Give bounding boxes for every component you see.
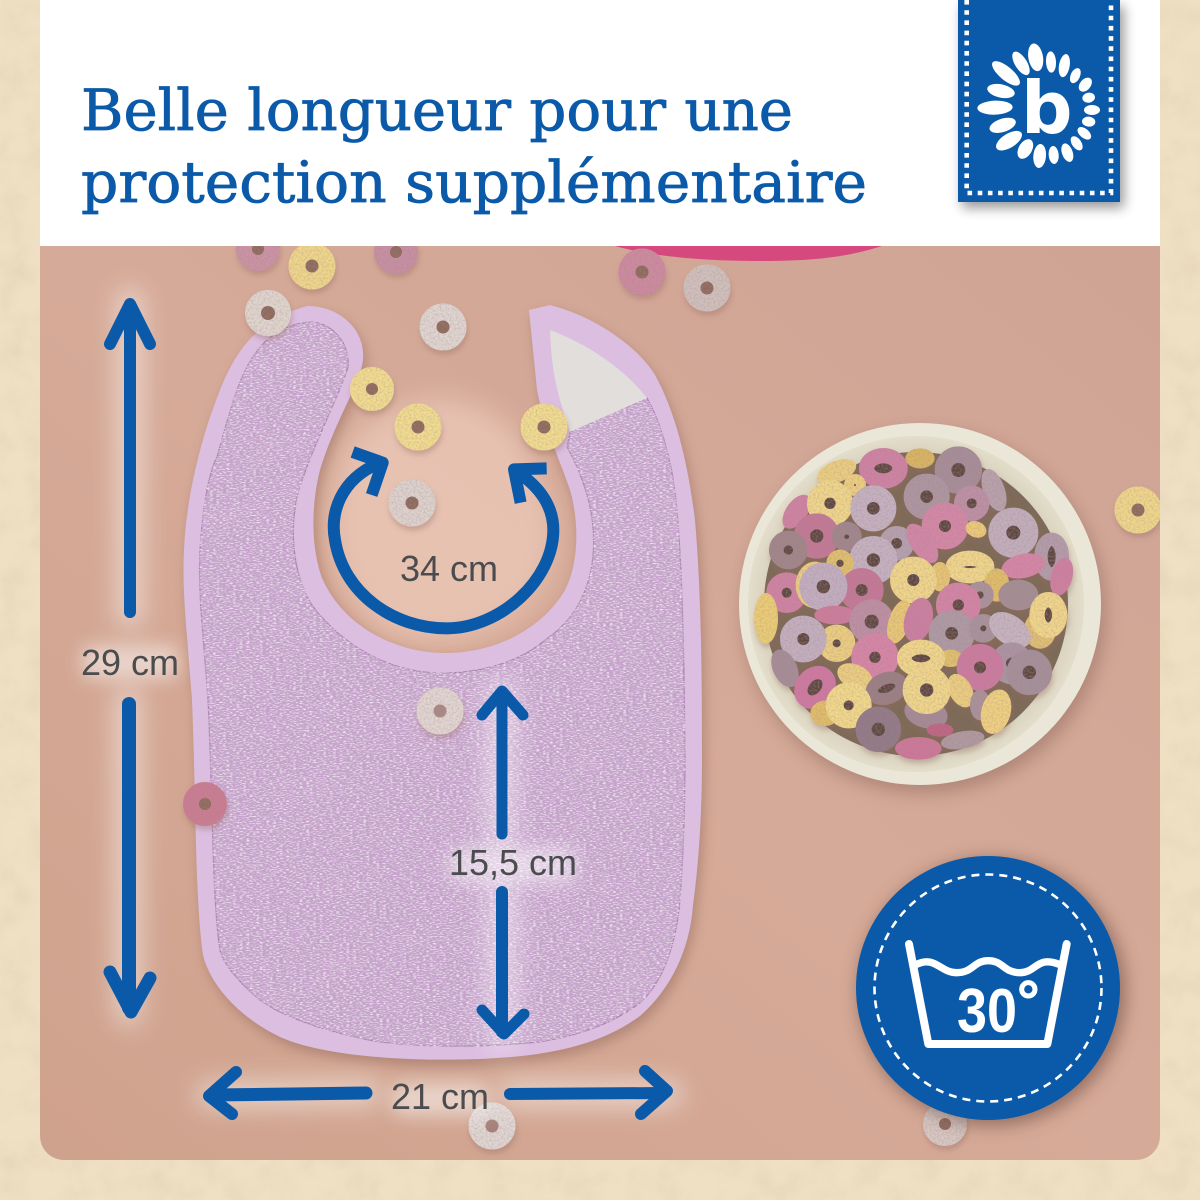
panel: photo surface (40, 235, 1160, 1160)
loose cereal behind bib (244, 235, 1153, 1138)
badge: wash 30 degrees (856, 856, 1120, 1120)
measurement labels: 15,5 cm (449, 842, 577, 883)
cereal rings (754, 448, 1077, 760)
arrow: width 21 cm (209, 1071, 667, 1114)
arrow glow (128, 300, 670, 1095)
arrow: neck 34 cm (334, 452, 553, 628)
icon: wash tub (909, 944, 1067, 1044)
measurement labels: 21 cm (391, 1076, 489, 1117)
neck glow (332, 399, 553, 640)
measurement labels (81, 548, 577, 1117)
badge shadow (859, 859, 1125, 1125)
icon: flower petals (977, 42, 1100, 169)
bib shadow (186, 311, 705, 1066)
cereal on bib (191, 298, 559, 1141)
measurement labels: 34 cm (400, 548, 498, 589)
bowl of cereal (739, 423, 1101, 785)
terry cloth (199, 322, 685, 1046)
velcro patch (550, 330, 647, 432)
title (81, 77, 867, 216)
badge: wash 30 degrees: 30 (957, 977, 1017, 1046)
logo letter: b (1021, 66, 1073, 150)
binding (183, 305, 702, 1060)
measurement labels: 29 cm (81, 642, 179, 683)
bowl shadow (743, 431, 1105, 793)
header band (40, 0, 1160, 246)
pink bib edge at top (615, 246, 882, 261)
logo shadow (962, 6, 1124, 208)
title: protection supplémentaire (81, 149, 867, 216)
arrow: depth 15,5 cm (482, 691, 524, 1034)
label glow (82, 645, 576, 1116)
bib (183, 305, 702, 1060)
title: Belle longueur pour une (81, 77, 793, 144)
arrow: height 29 cm (110, 304, 150, 1012)
logo tag (958, 0, 1120, 202)
